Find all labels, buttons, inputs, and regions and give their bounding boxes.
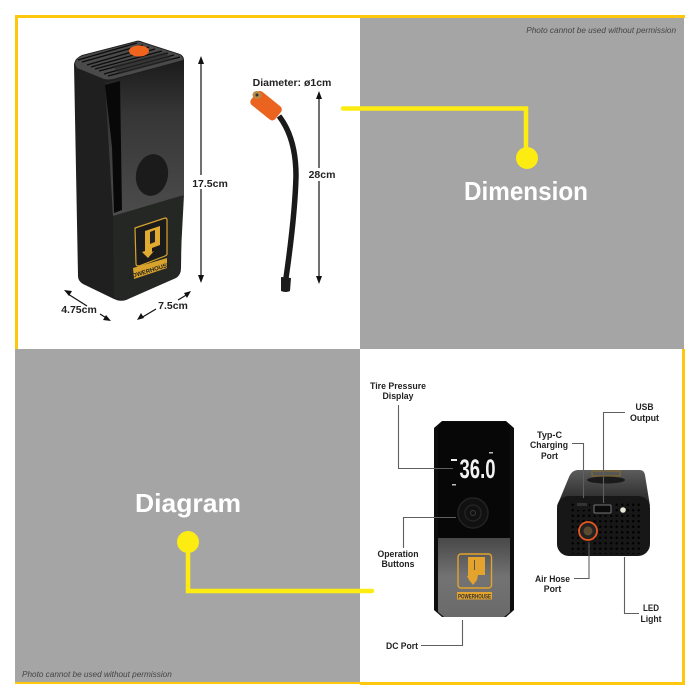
dimension: width arrow: 7.5cm [158, 300, 188, 312]
dimension: hose length arrow: 28cm [309, 169, 335, 181]
dimension: depth arrow [61, 290, 111, 321]
label: operation buttons: Operation [378, 549, 419, 560]
label: air hose port: Port [544, 584, 562, 595]
dimension: height arrow [190, 56, 228, 283]
label: USB output: Output [630, 413, 660, 424]
label: USB output: USB [636, 402, 654, 413]
label: hose diameter: Diameter: ø1cm [253, 77, 331, 89]
label: tire pressure display [370, 381, 453, 468]
port: air hose [579, 522, 597, 540]
label: air hose port: Air Hose [535, 574, 570, 585]
label: type-C charging port: Port [541, 451, 559, 462]
port: USB [592, 503, 613, 515]
heading: Diagram: Diagram [135, 488, 241, 518]
dimension: hose length arrow [308, 91, 336, 284]
LED [620, 507, 626, 513]
label: tire pressure display: Display [382, 391, 414, 402]
product photo: pump end view [557, 470, 650, 556]
label: LED light: LED [643, 603, 659, 614]
dimension: depth arrow: 4.75cm [61, 304, 97, 316]
label: DC port: DC Port [386, 641, 419, 652]
lens: round sensor [133, 152, 171, 198]
watermark: bottom left: Photo cannot be used without permission [22, 670, 172, 679]
label: LED light [624, 557, 662, 625]
panel: top-right grey background [360, 17, 684, 349]
watermark: top right: Photo cannot be used without permission [526, 26, 676, 35]
port: type-C [575, 501, 589, 510]
label: LED light: Light [640, 614, 662, 625]
label: air hose port [535, 542, 589, 595]
grille: vent holes [570, 502, 640, 554]
label: operation buttons [378, 518, 456, 570]
panel: bottom-left grey background [15, 349, 360, 683]
label: type-C charging port [530, 430, 584, 498]
heading: Dimension: Dimension [464, 176, 588, 206]
connector: diagram leader [177, 531, 372, 591]
label: type-C charging port: Charging [530, 440, 568, 451]
product photo: air hose [249, 89, 296, 292]
label: type-C charging port: Typ-C [537, 430, 562, 441]
dimension: width arrow [137, 291, 191, 320]
buttons: control wheel [458, 498, 488, 528]
button: orange top button [129, 46, 149, 56]
connector: dimension leader [343, 108, 538, 169]
logo: gold brand mark [128, 218, 172, 281]
label: tire pressure display: Tire Pressure [370, 381, 426, 392]
product photo: air pump perspective view [74, 41, 184, 301]
label: DC port [386, 620, 462, 652]
dimension: height arrow: 17.5cm [192, 178, 228, 190]
label: USB output [604, 402, 660, 503]
logo: gold brand mark: POWERHOUSE [128, 262, 172, 281]
product photo: pump front view [434, 421, 514, 617]
display: tire pressure reading: 36.0 [460, 454, 496, 484]
logo: gold brand mark [457, 554, 492, 600]
label: operation buttons: Buttons [382, 559, 414, 570]
logo: gold brand mark: POWERHOUSE [458, 594, 491, 600]
